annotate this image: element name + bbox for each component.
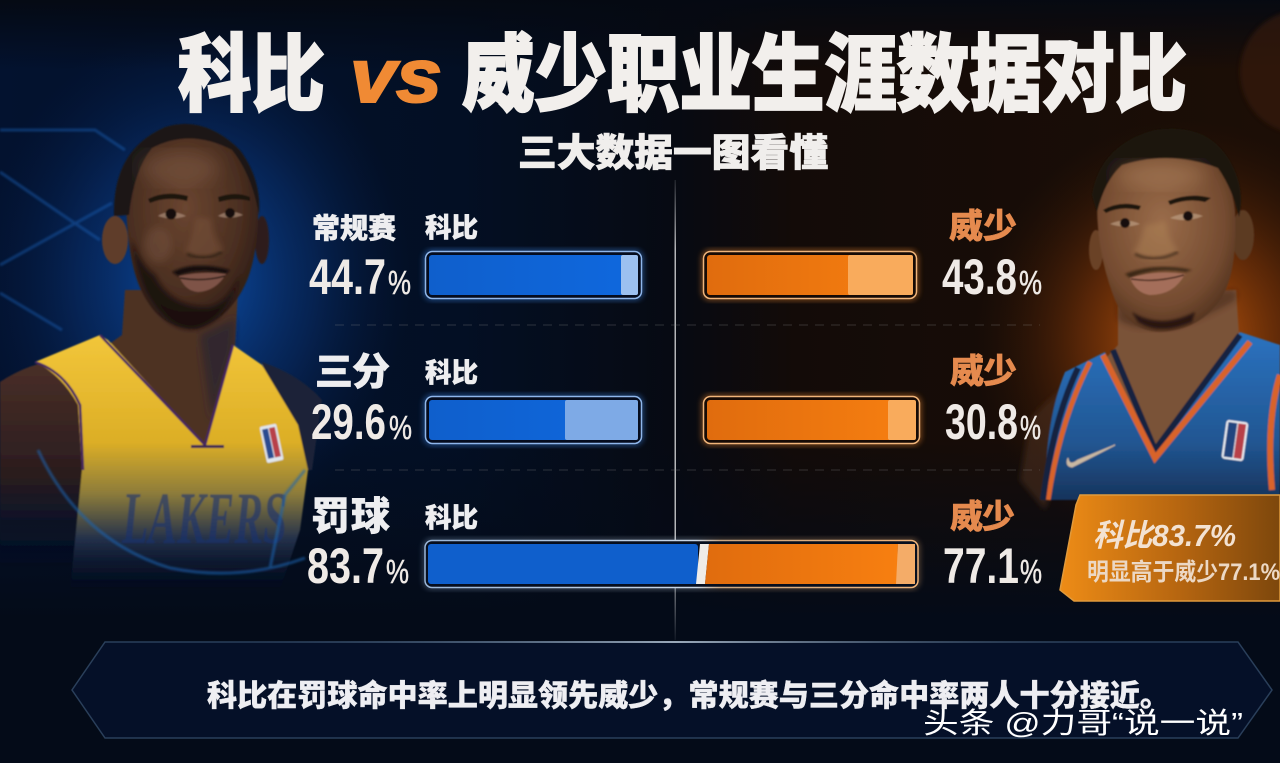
subtitle: 三大数据一图看懂	[518, 122, 828, 177]
yellow jersey	[35, 335, 308, 590]
label: Westbrook: 威少	[950, 490, 1015, 538]
lips	[1130, 273, 1185, 295]
value: Westbrook: 43.8	[942, 249, 1017, 305]
player: Russell Westbrook	[1020, 129, 1280, 510]
neck shadow	[200, 318, 236, 420]
brows	[148, 194, 250, 203]
callout headline: 科比83.7%	[1093, 518, 1236, 553]
value: Kobe: 83.7	[307, 538, 384, 594]
ears	[102, 216, 128, 264]
row: free throws	[307, 486, 1042, 594]
neck	[108, 290, 238, 445]
NBA logo	[1221, 420, 1249, 461]
brows	[1103, 196, 1211, 213]
row: three-pointers	[311, 341, 1041, 450]
hair	[114, 124, 259, 216]
watermark: 头条 @力哥“说一说”	[923, 707, 1243, 740]
title	[178, 28, 1187, 122]
value: Westbrook: %	[1019, 264, 1042, 301]
jersey trim	[35, 335, 233, 470]
label: Kobe: 科比	[425, 206, 478, 245]
NBA logo	[259, 424, 284, 463]
nostril shadow	[1135, 252, 1178, 259]
nose	[1133, 222, 1178, 259]
combined free-throw bar	[425, 540, 918, 588]
title: Kobe: 科比	[178, 28, 325, 122]
label: free throws: 罚球	[311, 486, 390, 542]
value: Kobe: %	[386, 553, 409, 590]
shoulder	[1020, 385, 1072, 510]
callout	[1060, 495, 1280, 601]
bar: Westbrook	[704, 252, 916, 298]
title: versus: vs	[350, 34, 442, 119]
Nike swoosh	[1067, 445, 1115, 467]
left arm	[0, 360, 84, 570]
orange collar	[1103, 342, 1250, 458]
head	[1097, 150, 1235, 332]
label: Westbrook: 威少	[950, 344, 1017, 393]
value: Kobe: 44.7	[309, 249, 386, 305]
head	[126, 127, 258, 329]
row dividers	[335, 325, 1040, 470]
blue energy arc over jersey	[38, 450, 305, 573]
pupils	[166, 208, 176, 220]
neck shadow	[1118, 290, 1236, 329]
value: Westbrook: 77.1	[943, 538, 1019, 594]
eyes	[158, 212, 243, 218]
nose	[185, 218, 223, 258]
forehead highlight	[140, 151, 220, 185]
pupils	[1120, 218, 1130, 228]
lips	[179, 273, 226, 292]
hair	[1092, 129, 1241, 217]
cheek highlight	[144, 227, 172, 263]
jersey collar trim	[1113, 335, 1240, 450]
beard	[132, 240, 240, 329]
center divider	[674, 180, 676, 640]
player: Kobe Bryant	[0, 124, 322, 590]
moustache	[1125, 267, 1192, 278]
eyes	[1110, 213, 1203, 226]
value: Kobe: %	[389, 409, 412, 446]
moustache	[172, 265, 230, 276]
label: Kobe: 科比	[425, 496, 478, 535]
decorative blue tech lines	[0, 130, 125, 330]
jersey collar notch	[191, 445, 224, 448]
value: Westbrook: %	[1020, 409, 1041, 446]
armhole trim	[1048, 362, 1090, 500]
title: remainder: 威少职业生涯数据对比	[462, 28, 1187, 122]
value: Westbrook: 30.8	[945, 394, 1018, 450]
right shoulder	[262, 362, 322, 470]
label: regular season: 常规赛	[312, 207, 396, 247]
neck	[1095, 290, 1240, 462]
bar: Westbrook	[704, 396, 920, 444]
value: Kobe: %	[388, 264, 411, 301]
label: three-pointers: 三分	[315, 341, 390, 396]
row: regular season	[309, 199, 1042, 305]
summary text: 科比在罚球命中率上明显领先威少，常规赛与三分命中率两人十分接近。	[207, 671, 1170, 715]
bar: Kobe	[426, 396, 642, 444]
bar: Kobe	[426, 252, 642, 298]
value: Kobe: 29.6	[311, 394, 386, 450]
blue OKC jersey	[1045, 332, 1280, 500]
goatee	[1132, 312, 1195, 329]
value: Westbrook: %	[1020, 553, 1042, 590]
nose shadow	[187, 252, 222, 258]
Lakers wordmark: LAKERS	[121, 478, 287, 560]
label: Westbrook: 威少	[949, 199, 1017, 248]
forehead highlight	[1115, 161, 1205, 189]
summary panel	[72, 641, 1272, 738]
label: Kobe: 科比	[425, 351, 478, 390]
ears	[1089, 230, 1103, 270]
